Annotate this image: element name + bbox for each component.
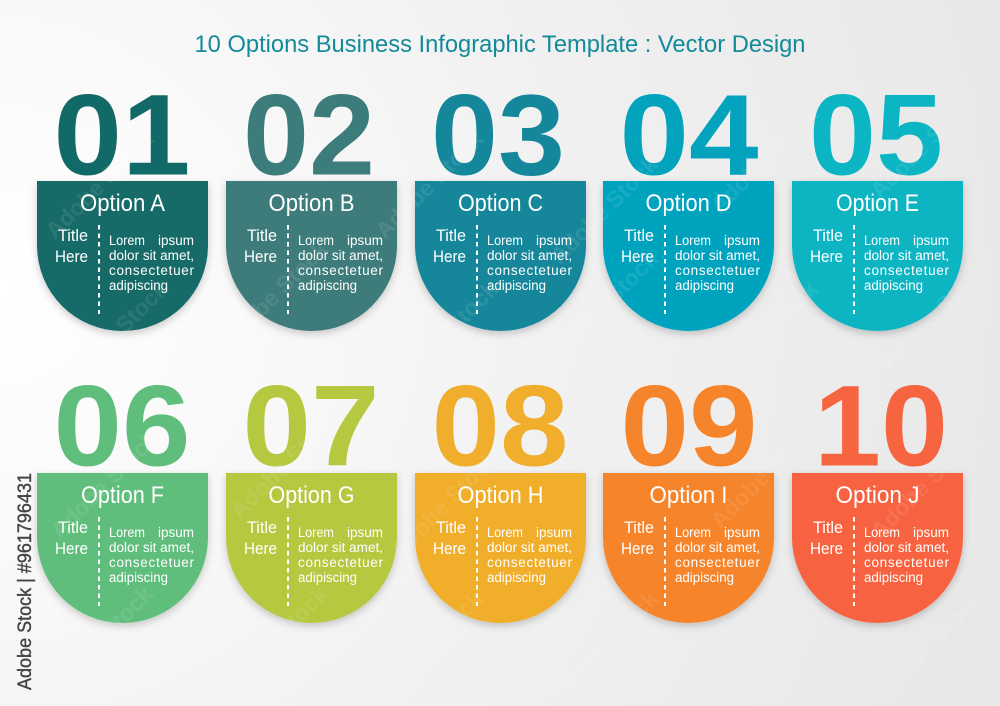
card I: adipiscing	[675, 570, 734, 585]
card A: Lorem	[109, 233, 145, 248]
card H: ipsum	[536, 525, 572, 540]
card D: Lorem	[675, 233, 711, 248]
card A: ipsum	[158, 233, 194, 248]
text: Adobe Stock	[385, 276, 503, 394]
text: Adobe Stock	[870, 586, 988, 704]
card H: adipiscing	[487, 570, 546, 585]
card F	[37, 473, 208, 623]
text: Adobe Stock	[705, 101, 823, 219]
text: Adobe Stock	[225, 406, 343, 524]
card H: Title	[436, 518, 466, 537]
card G: Lorem	[298, 525, 334, 540]
card I: consectetuer	[675, 555, 760, 570]
card F: Title	[58, 518, 88, 537]
number 06: 06	[54, 362, 190, 490]
card J: dolor sit amet,	[864, 540, 949, 555]
card J: Title	[813, 518, 843, 537]
text: Adobe Stock	[875, 256, 993, 374]
option 03	[415, 72, 586, 331]
card B	[226, 181, 397, 331]
text: Adobe Stock	[215, 236, 333, 354]
text: Adobe Stock	[370, 126, 488, 244]
card G: dolor sit amet,	[298, 540, 383, 555]
card J: ipsum	[913, 525, 949, 540]
card G: adipiscing	[298, 570, 357, 585]
card E: Title	[813, 226, 843, 245]
card G: Title	[247, 518, 277, 537]
card I: ipsum	[724, 525, 760, 540]
card A: adipiscing	[109, 278, 168, 293]
option 04	[603, 72, 774, 331]
side credit: Adobe Stock | #961796431	[15, 473, 36, 690]
card C: Option C	[458, 190, 543, 217]
card G: consectetuer	[298, 555, 384, 570]
card G	[226, 473, 397, 623]
card E: dolor sit amet,	[864, 248, 949, 263]
card B: dolor sit amet,	[298, 248, 383, 263]
card J: Option J	[836, 482, 920, 509]
card J: consectetuer	[864, 555, 950, 570]
text: Adobe Stock	[705, 276, 823, 394]
card A: dolor sit amet,	[109, 248, 194, 263]
card C	[415, 181, 586, 331]
card I: Lorem	[675, 525, 711, 540]
number 02: 02	[243, 72, 375, 200]
card C: ipsum	[536, 233, 572, 248]
card H	[415, 473, 586, 623]
card E: Option E	[836, 190, 919, 217]
card D: consectetuer	[675, 263, 760, 278]
card I	[603, 473, 774, 623]
option 07	[226, 362, 397, 623]
card D: Title	[624, 226, 654, 245]
text: Adobe Stock	[545, 246, 663, 364]
card I: dolor sit amet,	[675, 540, 760, 555]
text: Adobe Stock	[215, 581, 333, 699]
card A: consectetuer	[109, 263, 194, 278]
number 01: 01	[54, 72, 190, 200]
text: Adobe Stock	[370, 586, 488, 704]
card B: Title	[247, 226, 277, 245]
card J: Lorem	[864, 525, 900, 540]
card B: Lorem	[298, 233, 334, 248]
option 08	[415, 362, 586, 623]
text: Adobe Stock	[705, 586, 823, 704]
card H: Here	[433, 539, 466, 558]
card A	[37, 181, 208, 331]
card B: adipiscing	[298, 278, 357, 293]
card I: Option I	[650, 482, 728, 509]
option 05	[792, 72, 963, 331]
text: Adobe Stock	[45, 426, 163, 544]
option 09	[603, 362, 774, 623]
card E	[792, 181, 963, 331]
card B: Option B	[268, 190, 354, 217]
text: Adobe Stock	[40, 581, 158, 699]
text: Adobe Stock	[55, 276, 173, 394]
card H: dolor sit amet,	[487, 540, 572, 555]
option 06	[37, 362, 208, 623]
card D: dolor sit amet,	[675, 248, 760, 263]
number 04: 04	[620, 72, 759, 200]
card C: adipiscing	[487, 278, 546, 293]
text: Adobe Stock	[545, 151, 663, 269]
text: Adobe Stock	[545, 586, 663, 704]
card C: dolor sit amet,	[487, 248, 572, 263]
number 08: 08	[432, 362, 568, 490]
card F: ipsum	[158, 525, 194, 540]
card G: ipsum	[347, 525, 383, 540]
card A: Option A	[80, 190, 165, 217]
card E: ipsum	[913, 233, 949, 248]
card E: consectetuer	[864, 263, 950, 278]
card F: adipiscing	[109, 570, 168, 585]
card D	[603, 181, 774, 331]
title: 10 Options Business Infographic Template : Vector Design	[194, 31, 806, 58]
card J: Here	[810, 539, 843, 558]
card G: Option G	[268, 482, 354, 509]
text: Adobe Stock	[40, 126, 158, 244]
card B: ipsum	[347, 233, 383, 248]
card I: Title	[624, 518, 654, 537]
card G: Here	[244, 539, 277, 558]
card H: Lorem	[487, 525, 523, 540]
card E: Lorem	[864, 233, 900, 248]
card D: adipiscing	[675, 278, 734, 293]
card H: Option H	[458, 482, 544, 509]
card F: Option F	[81, 482, 164, 509]
card F: Here	[55, 539, 88, 558]
card B: Here	[244, 247, 277, 266]
card C: consectetuer	[487, 263, 572, 278]
number 09: 09	[620, 362, 758, 490]
option 01	[37, 72, 208, 331]
card H: consectetuer	[487, 555, 572, 570]
card J	[792, 473, 963, 623]
card A: Here	[55, 247, 88, 266]
card C: Title	[436, 226, 466, 245]
number 05: 05	[809, 72, 943, 200]
text: Adobe Stock	[385, 446, 503, 564]
text: Adobe Stock	[865, 426, 983, 544]
option 10	[792, 362, 963, 623]
card C: Lorem	[487, 233, 523, 248]
card C: Here	[433, 247, 466, 266]
card F: Lorem	[109, 525, 145, 540]
card D: Option D	[646, 190, 732, 217]
card A: Title	[58, 226, 88, 245]
card F: consectetuer	[109, 555, 194, 570]
number 07: 07	[242, 362, 380, 490]
card D: ipsum	[724, 233, 760, 248]
card I: Here	[621, 539, 654, 558]
card D: Here	[621, 247, 654, 266]
card B: consectetuer	[298, 263, 384, 278]
number 03: 03	[431, 72, 565, 200]
card E: Here	[810, 247, 843, 266]
option 02	[226, 72, 397, 331]
text: Adobe Stock	[865, 86, 983, 204]
card E: adipiscing	[864, 278, 923, 293]
text: Adobe Stock	[705, 416, 823, 534]
number 10: 10	[814, 362, 948, 490]
card F: dolor sit amet,	[109, 540, 194, 555]
card J: adipiscing	[864, 570, 923, 585]
